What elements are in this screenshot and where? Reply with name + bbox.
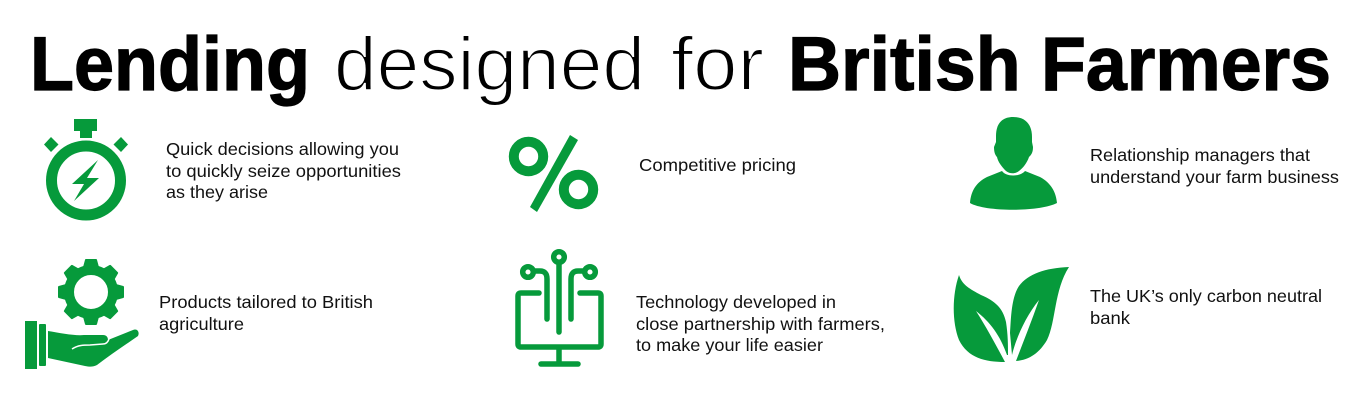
title: Lending bbox=[30, 22, 310, 107]
icon: percent sign bbox=[514, 135, 593, 212]
icon: person bbox=[970, 117, 1057, 210]
text: competitive pricing: Competitive pricing bbox=[639, 155, 796, 175]
text: technology developed: to make your life easier bbox=[636, 335, 823, 355]
text: relationship managers: understand your farm business bbox=[1090, 167, 1339, 187]
icon: circuit monitor bbox=[518, 252, 601, 364]
gear bbox=[59, 260, 123, 324]
text: quick decisions: to quickly seize opportunities bbox=[166, 161, 401, 181]
icon: gear over open hand bbox=[25, 260, 139, 369]
text: quick decisions: as they arise bbox=[166, 182, 268, 202]
hand bbox=[25, 321, 139, 369]
text: carbon neutral: bank bbox=[1090, 308, 1130, 328]
title: designed bbox=[334, 22, 645, 107]
text: quick decisions: Quick decisions allowing you bbox=[166, 139, 399, 159]
icon: stopwatch bbox=[44, 119, 128, 215]
text: carbon neutral: The UK’s only carbon neutral bbox=[1090, 286, 1322, 306]
icon: two leaves bbox=[954, 267, 1069, 362]
text: technology developed: close partnership with farmers, bbox=[636, 314, 885, 334]
text: technology developed: Technology developed in bbox=[636, 292, 836, 312]
title: British Farmers bbox=[788, 22, 1331, 107]
text: products tailored: agriculture bbox=[159, 314, 244, 334]
text: relationship managers: Relationship managers that bbox=[1090, 145, 1310, 165]
text: products tailored: Products tailored to British bbox=[159, 292, 373, 312]
title: for bbox=[671, 22, 764, 107]
title bbox=[30, 22, 1331, 107]
